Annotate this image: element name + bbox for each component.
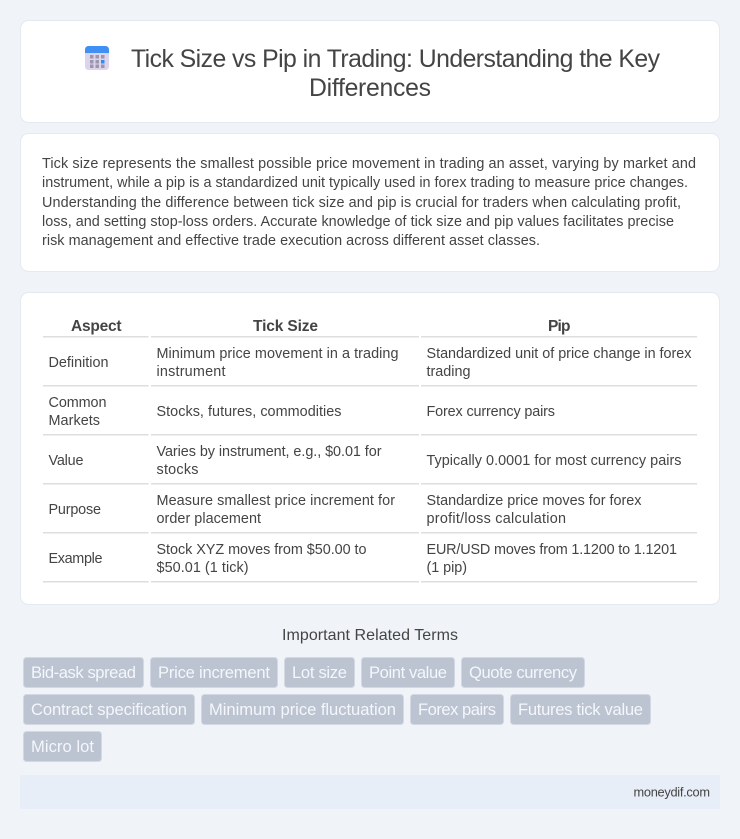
table row: example: EUR/USD moves from 1.1200 to 1.1201 [426, 542, 677, 558]
icon: calendar [85, 46, 109, 70]
text block: intro paragraph: risk management and effective trade execution across different asset classes. [42, 233, 540, 249]
tag: forex pairs: Forex pairs [418, 700, 496, 719]
table row: example [43, 542, 697, 582]
table row: value: Typically 0.0001 for most currency pairs [426, 453, 682, 469]
panel: intro [20, 134, 720, 272]
tag list: related terms [24, 658, 650, 762]
tag: price increment [150, 658, 278, 688]
table row: purpose [43, 493, 697, 534]
table row: common markets: Markets [48, 413, 100, 429]
table row: value: stocks [156, 462, 198, 478]
tag: quote currency [462, 658, 584, 688]
footer [20, 775, 720, 809]
title [131, 46, 661, 102]
table row: value: Varies by instrument, e.g., $0.01 for [156, 444, 382, 460]
tag: point value: Point value [369, 663, 447, 682]
table header row: Aspect [71, 318, 122, 335]
tag: quote currency: Quote currency [469, 663, 578, 682]
tag: lot size [284, 658, 354, 688]
panel: header [20, 20, 720, 122]
text block: intro paragraph [42, 156, 696, 249]
table row: common markets: Stocks, futures, commodities [156, 404, 342, 420]
text block: intro paragraph: loss, and setting stop-loss orders. Accurate knowledge of tick size and pip values facilitates precise [42, 214, 674, 230]
tag: minimum price fluctuation: Minimum price fluctuation [209, 700, 396, 719]
tag: minimum price fluctuation [202, 694, 404, 724]
tag: bid-ask spread [24, 658, 144, 688]
table row: value [43, 444, 697, 484]
table row: example: (1 pip) [426, 560, 467, 576]
tag: contract specification [24, 694, 194, 724]
table row: common markets [43, 395, 697, 436]
text block: intro paragraph: instrument, while a pip is a standardized unit typically used in forex trading to measure price changes. [42, 175, 688, 191]
table row: purpose: profit/loss calculation [426, 511, 566, 527]
tag: forex pairs [410, 694, 504, 724]
text block: intro paragraph: Understanding the difference between tick size and pip is crucial for traders when calculating profit, [42, 195, 681, 211]
text block: intro paragraph: Tick size represents the smallest possible price movement in trading an asset, varying by market and [42, 156, 696, 172]
tag: bid-ask spread: Bid-ask spread [31, 663, 136, 682]
table header row [43, 318, 697, 338]
table row: definition: instrument [156, 364, 226, 380]
table row: definition: Standardized unit of price change in forex [426, 346, 692, 362]
tag: contract specification: Contract specification [31, 700, 187, 719]
table row: purpose: Purpose [48, 502, 101, 518]
table row: definition: trading [426, 364, 470, 380]
panel: comparison table [20, 292, 720, 604]
tag: micro lot [24, 732, 102, 762]
table row: purpose: Measure smallest price increment for [156, 493, 395, 509]
footer: moneydif.com [634, 784, 710, 800]
table row: example: $50.01 (1 tick) [156, 560, 248, 576]
tag: price increment: Price increment [158, 663, 270, 682]
tag: lot size: Lot size [292, 663, 347, 682]
tag: micro lot: Micro lot [31, 737, 94, 756]
table row: purpose: order placement [156, 511, 261, 527]
table row: example: Stock XYZ moves from $50.00 to [156, 542, 366, 558]
table row: example: Example [48, 551, 102, 567]
table row: purpose: Standardize price moves for forex [426, 493, 642, 509]
table row: definition: Definition [48, 355, 108, 371]
tag: futures tick value: Futures tick value [518, 700, 643, 719]
table row: definition [43, 346, 697, 386]
tag: point value [362, 658, 454, 688]
table header row: Tick Size [253, 318, 318, 335]
tag: futures tick value [510, 694, 650, 724]
table row: common markets: Forex currency pairs [426, 404, 555, 420]
table row: definition: Minimum price movement in a trading [156, 346, 398, 362]
title: Tick Size vs Pip in Trading: Understanding the Key [131, 46, 661, 73]
table header row: Pip [548, 318, 570, 335]
heading: related terms: Important Related Terms [282, 627, 458, 644]
table row: common markets: Common [48, 395, 106, 411]
table row: value: Value [48, 453, 84, 469]
title: Differences [309, 75, 431, 102]
